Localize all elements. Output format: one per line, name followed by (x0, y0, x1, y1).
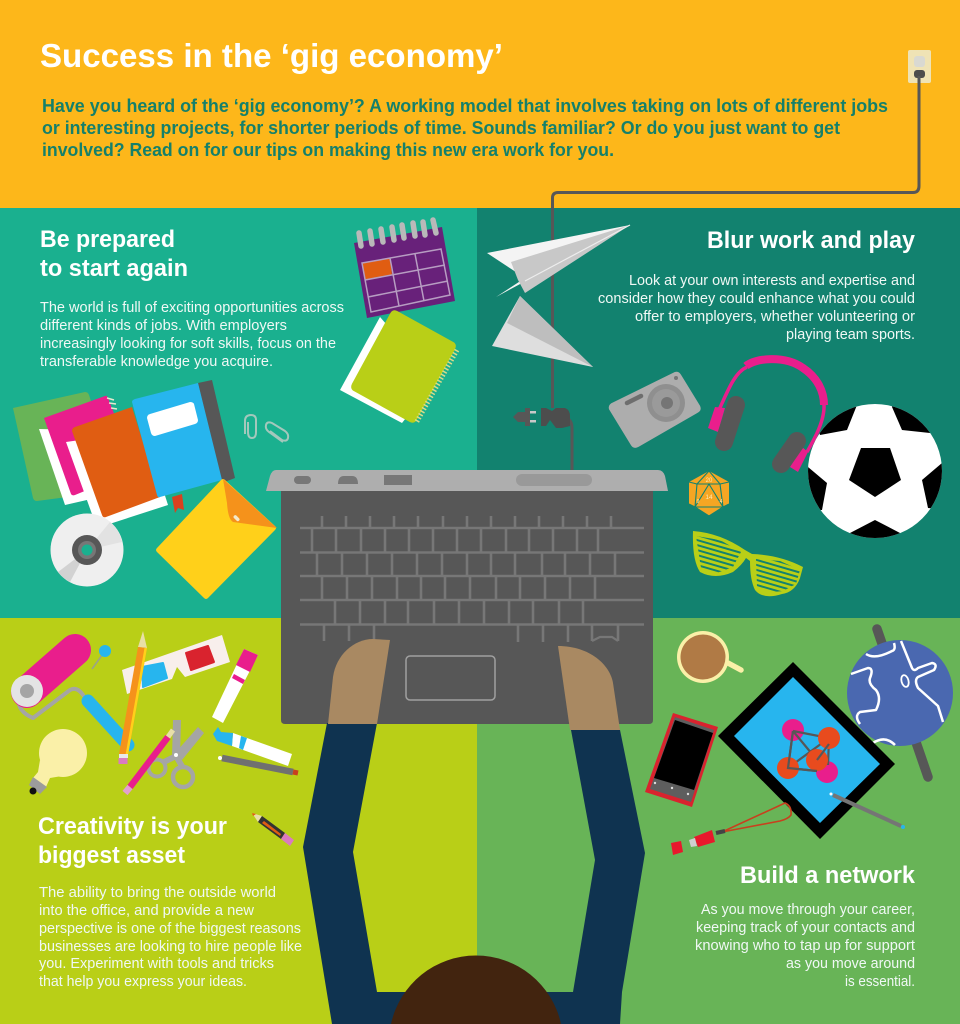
text: creativity body: into the office, and provide a new (39, 903, 255, 919)
power cord (552, 76, 919, 408)
intro text (42, 96, 888, 160)
icon: grey marker (218, 756, 298, 773)
icon: camera (610, 373, 700, 447)
text: build a network body: as you move around (786, 956, 915, 972)
person: arms and torso (303, 723, 645, 1024)
icon: paint roller (11, 650, 128, 745)
panel: blur work and play background (477, 208, 960, 618)
text: blur work body: Look at your own interests and expertise and (629, 273, 915, 289)
icon: 3D glasses (122, 635, 230, 694)
text: be prepared body: increasingly looking for soft skills, focus on the (40, 336, 336, 352)
icon: wall outlet (908, 50, 931, 83)
icon: soccer ball (808, 404, 942, 538)
text: build a network body: As you move through your career, (701, 902, 915, 918)
heading: creativity (38, 813, 227, 869)
icon: envelope (156, 479, 277, 599)
text: be prepared body: different kinds of jobs. With employers (40, 318, 287, 334)
text: creativity body: The ability to bring the outside world (39, 885, 276, 901)
icon: compact disc (50, 514, 124, 586)
text: build a network body: keeping track of your contacts and (696, 920, 915, 936)
text: blur work body: consider how they could enhance what you could (598, 291, 915, 307)
icon: white tube with blue cap (213, 727, 292, 766)
icon: stylus (830, 792, 905, 829)
icon: tablet (718, 662, 895, 839)
text: be prepared body: The world is full of exciting opportunities across (40, 300, 344, 316)
icon: scissors (148, 720, 204, 787)
panel: creativity background (0, 618, 477, 1024)
intro text: Have you heard of the ‘gig economy’? A working model that involves taking on lots of different jobs (42, 96, 888, 116)
icon: shutter sunglasses (690, 531, 805, 599)
icon: paperclips (245, 415, 288, 442)
text: creativity body: you. Experiment with tools and tricks (39, 956, 274, 972)
text: blur work body (598, 273, 915, 343)
person: head (391, 956, 561, 1024)
icon: unplugged plug (513, 408, 570, 428)
icon: twenty-sided die: 9 (697, 499, 700, 505)
heading: creativity: biggest asset (38, 842, 185, 869)
panel: be prepared background (0, 208, 477, 618)
text: be prepared body (40, 300, 344, 370)
icon: twenty-sided die (689, 471, 729, 516)
icon: glue tube (212, 649, 258, 723)
text: build a network body: is essential. (845, 974, 915, 990)
panel: header background (0, 0, 960, 208)
cord to laptop (560, 417, 572, 471)
icon: USB stick with lanyard (671, 803, 791, 855)
person: left hand (328, 639, 390, 724)
icon: orange pencil (118, 631, 147, 764)
text: build a network body: knowing who to tap up for support (695, 938, 915, 954)
icon: headphones (708, 359, 824, 472)
text: creativity body: that help you express your ideas. (39, 974, 247, 990)
icon: lime notebook (340, 311, 457, 423)
text: blur work body: offer to employers, whether volunteering or (635, 309, 915, 325)
text: blur work body: playing team sports. (786, 327, 915, 343)
laptop (266, 470, 668, 724)
icon: smartphone (645, 713, 718, 807)
icon: coffee cup (677, 631, 741, 683)
icon: twenty-sided die: 20 (706, 478, 713, 484)
heading: be prepared: Be prepared (40, 226, 175, 253)
panel: build a network background (477, 618, 960, 1024)
icon: stack of notebooks (13, 380, 235, 528)
icon: pink pencil (125, 730, 173, 793)
heading: be prepared: to start again (40, 255, 188, 282)
icon: small pencil (252, 813, 294, 846)
heading: blur work and play: Blur work and play (707, 227, 916, 254)
text: creativity body: businesses are looking to hire people like (39, 939, 302, 955)
icon: twenty-sided die: 14 (705, 494, 713, 501)
person: right hand (558, 646, 620, 730)
text: be prepared body: transferable knowledge you acquire. (40, 354, 273, 370)
heading: be prepared (40, 226, 188, 282)
icon: paper plane one (487, 225, 630, 297)
title: Success in the ‘gig economy’ (40, 37, 503, 74)
intro text: involved? Read on for our tips on making this new era work for you. (42, 140, 614, 160)
icon: paper plane two (492, 296, 593, 367)
icon: light bulb (29, 729, 87, 794)
heading: creativity: Creativity is your (38, 813, 227, 840)
text: build a network body (695, 902, 915, 990)
icon: calendar (354, 220, 455, 318)
icon: blue pin (92, 645, 111, 669)
intro text: or interesting projects, for shorter periods of time. Sounds familiar? Or do you just want to get (42, 118, 840, 138)
text: creativity body: perspective is one of the biggest reasons (39, 921, 301, 937)
icon: globe (847, 629, 953, 777)
icon: twenty-sided die: 4 (720, 499, 723, 505)
heading: build a network: Build a network (740, 862, 916, 889)
text: creativity body (39, 885, 302, 990)
